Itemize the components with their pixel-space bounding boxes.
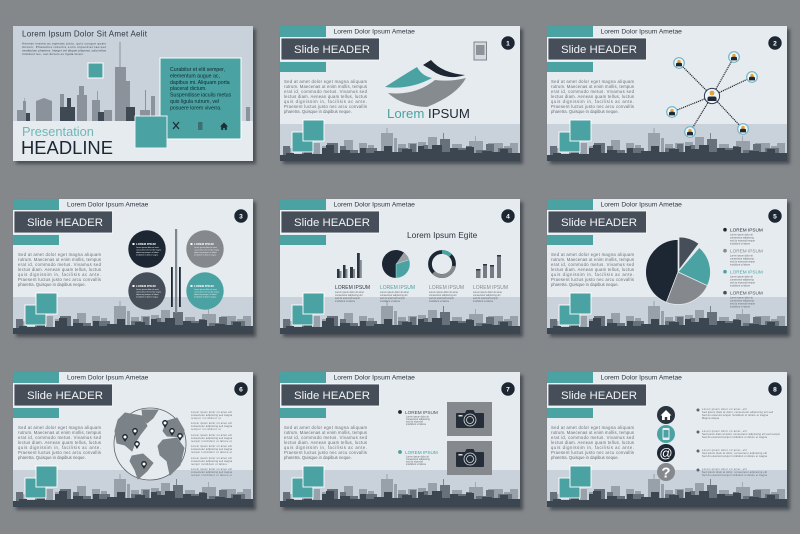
right text column: consectetur adipiscing sed magna [191, 414, 233, 417]
teal text panel: Suspendisse iaculis metus [170, 93, 232, 99]
right text column: consectetur adipiscing sed magna [191, 425, 233, 428]
body text: rutrum. Maecenas ut enim mollis, tempus [551, 430, 634, 435]
body text: erat id, commodo metus. Vivamus sed [284, 435, 368, 440]
list item 3: Lorem ipsum dolor sit amet, elit [702, 449, 747, 452]
number badge [501, 382, 515, 396]
circle: dark: consectetur elit sed do magna [136, 248, 162, 252]
list item 2 [696, 430, 780, 439]
slide 7: photos [280, 372, 523, 510]
circle: slate: Lorem ipsum dolor sit amet [136, 288, 159, 291]
icon: at sign: @ [659, 446, 673, 460]
body text: quis dignissim in, facilisis ac ante. [284, 445, 367, 450]
legend item 4: consectetur adipiscing [730, 300, 754, 302]
body text [551, 425, 635, 460]
top title: Lorem Dolor Ipsum Ametae [600, 202, 682, 208]
top title: Lorem Dolor Ipsum Ametae [334, 28, 415, 36]
logo mark [385, 60, 466, 107]
teal squares [25, 293, 57, 325]
body text: rutrum. Maecenas ut enim mollis, tempus [551, 84, 634, 89]
icon: phone [198, 122, 202, 130]
number badge: 1 [506, 40, 510, 47]
list item 2: Sed do eiusmod tempor incididunt ut dolore et magna [702, 436, 768, 439]
label block 3: sed do eiusmod tempor [429, 297, 454, 300]
body text: Sed at amet dolor eget magna aliquam [284, 79, 368, 84]
body text: erat id, commodo metus. Vivamus sed [18, 262, 102, 267]
body text: quis dignissim in, facilisis ac ante. [551, 272, 634, 277]
icon: tablet [474, 42, 486, 60]
label block 1: LOREM IPSUM [335, 285, 370, 291]
header bar [14, 384, 112, 406]
slide 5: pie [547, 199, 790, 337]
teal squares [292, 293, 324, 325]
body text: lectus diam. Aenean quam tellus, luctus [284, 440, 367, 445]
number badge [501, 209, 515, 223]
circle: grey: adipiscing tempor ut labore [194, 251, 217, 254]
legend item 1: sed do eiusmod tempor [730, 240, 755, 242]
circle: dark: incididunt et dolore magna [136, 254, 159, 256]
globe with pins [114, 408, 186, 480]
list item 1 [696, 408, 774, 420]
body text: pharetra. Quisque in dapibus neque. [284, 109, 352, 114]
label block 4 [473, 285, 508, 303]
top title: Lorem Dolor Ipsum Ametae [67, 202, 149, 208]
teal text panel: placerat dictum. [170, 86, 207, 92]
header text: Slide HEADER [561, 390, 637, 402]
body text: lectus diam. Aenean quam tellus, luctus [551, 267, 634, 272]
label block 4: Lorem ipsum dolor sit amet [473, 291, 502, 294]
text item 1 [398, 410, 438, 426]
circle: grey: Lorem ipsum dolor sit amet [194, 246, 217, 249]
teal text panel [160, 58, 241, 139]
teal text panel: quis ligula rutrum, vel [170, 99, 219, 105]
teal squares [559, 293, 591, 325]
label block 1 [335, 285, 370, 303]
text item 1: incididunt ut labore [406, 423, 427, 426]
number badge [234, 209, 248, 223]
icon: question mark [657, 463, 675, 482]
legend item 1: incididunt ut labore [730, 242, 751, 246]
cover intro text: vestibulum pharetra. Integer vel aliquet placerat, odio tellus [22, 48, 106, 52]
circle: teal: Lorem ipsum dolor sit amet [194, 288, 217, 291]
body text: Sed at amet dolor eget magna aliquam [551, 79, 634, 84]
body text: quis dignissim in, facilisis ac ante. [284, 99, 367, 104]
right text column: Lorem ipsum dolor sit amet elit [191, 434, 232, 437]
teal squares [292, 466, 324, 498]
text item 2: sed do eiusmod [406, 460, 424, 464]
legend item 3: incididunt ut labore [730, 284, 751, 288]
right text column: consectetur adipiscing sed magna [191, 437, 233, 440]
header bar [14, 211, 112, 233]
body text [284, 425, 368, 460]
body text: erat id, commodo metus. Vivamus sed [18, 435, 102, 440]
label block 2: sed do eiusmod tempor [380, 297, 405, 300]
number badge [768, 36, 782, 50]
icon: home [220, 122, 228, 130]
header text: Slide HEADER [561, 44, 637, 56]
top title: Lorem Dolor Ipsum Ametae [334, 202, 415, 208]
label block 2: incididunt ut labore [380, 300, 401, 303]
circle: dark [128, 230, 166, 268]
label block 2: Lorem ipsum dolor sit amet [380, 291, 409, 294]
label block 3: LOREM IPSUM [429, 285, 464, 291]
number badge [501, 36, 515, 50]
right text column: Lorem ipsum dolor sit amet elit [191, 457, 232, 460]
list item 1: Sed ipsum diam at dolor, consectetur adipiscing elit sed [702, 411, 774, 414]
label block 4: sed do eiusmod tempor [473, 297, 498, 300]
teal text panel: posuere lorem viverra. [170, 105, 222, 111]
right text column: tempor incididunt ut [191, 428, 221, 431]
teal text panel: Curabitur et elit semper, [170, 67, 225, 73]
body text: pharetra. Quisque in dapibus neque. [551, 455, 619, 460]
body text: Praesent luctus justo nec arcu convallis [284, 450, 367, 455]
teal text panel: dapibus mi. Aliquam porta [170, 80, 230, 86]
body text: lectus diam. Aenean quam tellus, luctus [284, 94, 367, 99]
circle: teal: consectetur elit sed do magna [194, 290, 220, 294]
label block 1: sed do eiusmod tempor [335, 297, 360, 300]
label block 4: LOREM IPSUM [473, 285, 508, 291]
legend item 3 [723, 270, 763, 288]
icon: question mark: ? [661, 464, 671, 482]
number badge: 2 [773, 40, 777, 47]
cover title: Lorem Ipsum Dolor Sit Amet Aelit [22, 30, 148, 38]
cover intro text: dictum. Phasellus lobortis enim imperdiet laoreet [22, 45, 106, 49]
circle: grey: incididunt et dolore magna [194, 254, 217, 256]
legend item 3: sed do eiusmod tempor [730, 282, 755, 284]
legend item 4: Lorem ipsum dolor sit [730, 296, 753, 300]
right text column: tempor incididunt ut labore et [191, 474, 232, 477]
legend item 4 [723, 290, 763, 308]
text item 2: incididunt ut labore [406, 463, 427, 466]
legend item 1: consectetur adipiscing [730, 236, 754, 240]
cover intro text: Aenean massa ac egestas justo, quis congue quam [22, 42, 107, 46]
body text [551, 252, 635, 287]
label block 1: consectetur adipiscing elit [335, 294, 363, 297]
body text: lectus diam. Aenean quam tellus, luctus [551, 440, 634, 445]
top title: Lorem Dolor Ipsum Ametae [67, 374, 149, 382]
list item 4: Lorem ipsum dolor sit amet, elit [702, 468, 747, 471]
right text column: Lorem ipsum dolor sit amet elit [191, 411, 232, 414]
right text column: tempor incididunt ut labore et [191, 440, 232, 443]
header text: Slide HEADER [27, 390, 103, 402]
right text column: tempor incididunt ut labore et [191, 451, 232, 454]
header bar [281, 38, 380, 60]
bar chart: left [337, 253, 362, 278]
number badge: 4 [506, 213, 510, 220]
text item 1: consectetur adipiscing [406, 418, 430, 421]
right text column [191, 411, 233, 477]
slide 8: icon list [547, 372, 790, 510]
right text column: consectetur adipiscing sed magna [191, 448, 233, 451]
teal text panel: elementum augue ac, [170, 73, 220, 79]
legend item 2: incididunt ut labore [730, 264, 751, 266]
body text: quis dignissim in, facilisis ac ante. [18, 445, 101, 450]
slide: cover [13, 26, 256, 164]
list item 2: Sed ipsum diam at dolor, consectetur adipiscing elit sed tempor [702, 433, 780, 436]
body text: erat id, commodo metus. Vivamus sed [551, 435, 635, 440]
circle: dark: adipiscing tempor ut labore [136, 251, 159, 254]
label block 4: incididunt ut labore [473, 300, 494, 303]
body text [551, 79, 635, 114]
body text: rutrum. Maecenas ut enim mollis, tempus [284, 84, 367, 89]
text item 2: consectetur adipiscing [406, 458, 430, 461]
body text: erat id, commodo metus. Vivamus sed [551, 89, 635, 94]
body text: Praesent luctus justo nec arcu convallis [551, 104, 634, 109]
circle: teal: incididunt et dolore magna [194, 296, 217, 298]
number badge [234, 382, 248, 396]
list item 1: Magna aliqua [702, 417, 720, 420]
header bar [548, 38, 646, 60]
number badge: 7 [506, 386, 510, 393]
legend item 3: consectetur adipiscing [730, 278, 754, 282]
label block 2 [380, 285, 415, 303]
legend item 2: sed do eiusmod tempor [730, 260, 755, 264]
donut chart [430, 252, 454, 276]
cover intro text: tincidunt leo, non dictum ex ligula lorem. [22, 52, 84, 56]
body text: rutrum. Maecenas ut enim mollis, tempus [551, 257, 634, 262]
small teal square [88, 63, 103, 78]
legend item 4: incididunt ut labore [730, 306, 751, 308]
number badge: 5 [773, 213, 777, 220]
legend item 2: LOREM IPSUM [730, 248, 763, 254]
body text: Sed at amet dolor eget magna aliquam [551, 252, 634, 257]
legend item 4: sed do eiusmod tempor [730, 302, 755, 306]
body text: pharetra. Quisque in dapibus neque. [551, 109, 619, 114]
body text: lectus diam. Aenean quam tellus, luctus [18, 267, 101, 272]
list item 3: Sed do eiusmod tempor incididunt ut dolore et magna [702, 455, 768, 458]
header text: Slide HEADER [294, 390, 370, 402]
body text: Praesent luctus justo nec arcu convallis [284, 104, 367, 109]
circle: teal: LOREM IPSUM [194, 284, 214, 288]
circle: slate: incididunt et dolore magna [136, 296, 159, 298]
label block 4: consectetur adipiscing elit [473, 294, 501, 297]
body text [18, 252, 102, 287]
label block 1: incididunt ut labore [335, 300, 356, 303]
center bars [171, 229, 181, 313]
legend item 1 [723, 228, 763, 246]
logo text: Lorem IPSUM [387, 106, 470, 121]
header text: Slide HEADER [561, 217, 637, 229]
circle: slate: LOREM IPSUM [136, 284, 156, 288]
list item 1: Lorem ipsum dolor sit amet, elit [702, 408, 747, 411]
list item 1: Sed do eiusmod tempor incididunt ut dolore et magna [702, 414, 769, 417]
right text column: consectetur adipiscing sed magna [191, 460, 233, 463]
slide 1: logo [280, 26, 523, 164]
circle: dark: LOREM IPSUM [136, 242, 156, 246]
number badge [768, 209, 782, 223]
right text column: Lorem ipsum dolor sit amet elit [191, 445, 232, 448]
body text [18, 425, 102, 460]
body text: lectus diam. Aenean quam tellus, luctus [551, 94, 634, 99]
slide 6: globe [13, 372, 256, 510]
large teal square [135, 116, 167, 148]
legend item 2: consectetur adipiscing [730, 258, 754, 260]
list item 3: Sed ipsum diam at dolor, consectetur adipiscing elit [702, 452, 767, 455]
circle: slate: adipiscing tempor ut labore [136, 293, 159, 296]
body text: pharetra. Quisque in dapibus neque. [18, 455, 86, 460]
circle: slate: consectetur elit sed do magna [136, 290, 162, 294]
label block 2: LOREM IPSUM [380, 285, 415, 291]
bar chart: right [476, 255, 501, 278]
circle: teal [186, 272, 224, 310]
body text: Praesent luctus justo nec arcu convallis [551, 450, 634, 455]
number badge [768, 382, 782, 396]
body text [284, 79, 368, 114]
body text: Praesent luctus justo nec arcu convallis [18, 277, 101, 282]
pie chart [646, 237, 710, 304]
body text: quis dignissim in, facilisis ac ante. [18, 272, 101, 277]
circle: dark: Lorem ipsum dolor sit amet [136, 246, 159, 249]
circle: grey: LOREM IPSUM [194, 242, 214, 246]
header text: Slide HEADER [294, 44, 370, 56]
body text: Sed at amet dolor eget magna aliquam [551, 425, 634, 430]
slide 2: network [547, 26, 790, 164]
body text: erat id, commodo metus. Vivamus sed [284, 89, 368, 94]
circle: teal: adipiscing tempor ut labore [194, 293, 217, 296]
network diagram [667, 52, 757, 137]
icon: home [657, 406, 675, 424]
right text column: tempor incididunt ut labore [191, 463, 228, 466]
list item 4: Sed ipsum diam at dolor, consectetur adipiscing elit [702, 471, 767, 474]
text item 2: LOREM IPSUM [405, 450, 438, 455]
circle: slate [128, 272, 166, 310]
legend item 1: LOREM IPSUM [730, 228, 763, 232]
header text: Slide HEADER [294, 217, 370, 229]
teal squares [559, 466, 591, 498]
right text column: Lorem ipsum dolor sit amet elit [191, 468, 232, 471]
legend item 3: Lorem ipsum dolor sit [730, 276, 753, 278]
number badge: 3 [239, 213, 243, 220]
body text: rutrum. Maecenas ut enim mollis, tempus [18, 257, 101, 262]
header bar [281, 211, 380, 233]
header bar [281, 384, 380, 406]
pie chart [382, 250, 410, 278]
top title: Lorem Dolor Ipsum Ametae [334, 374, 415, 382]
legend item 3: LOREM IPSUM [730, 270, 763, 274]
top title: Lorem Dolor Ipsum Ametae [600, 374, 682, 382]
label block 3: consectetur adipiscing elit [429, 294, 457, 297]
body text: rutrum. Maecenas ut enim mollis, tempus [284, 430, 367, 435]
label block 1: Lorem ipsum dolor sit amet [335, 291, 364, 294]
body text: Sed at amet dolor eget magna aliquam [18, 425, 102, 430]
body text: lectus diam. Aenean quam tellus, luctus [18, 440, 101, 445]
teal squares [292, 120, 324, 152]
header bar [548, 211, 646, 233]
body text: Praesent luctus justo nec arcu convallis [551, 277, 634, 282]
body text: quis dignissim in, facilisis ac ante. [551, 99, 634, 104]
photo placeholder 1 [447, 402, 492, 436]
top title: Lorem Dolor Ipsum Ametae [600, 28, 682, 36]
text item 2 [398, 450, 438, 466]
number badge: 8 [773, 386, 777, 393]
chart heading: Lorem Ipsum Egite [407, 230, 478, 240]
right text column: tempor incididunt ut [191, 417, 221, 420]
right text column: consectetur adipiscing sed magna [191, 471, 233, 474]
presentation heading: Presentation [22, 124, 94, 139]
body text: pharetra. Quisque in dapibus neque. [284, 455, 352, 460]
cover intro text [22, 42, 107, 56]
text item 1: Lorem ipsum dolor sit [406, 416, 429, 418]
text item 2: Lorem ipsum dolor sit [406, 456, 429, 458]
label block 2: consectetur adipiscing elit [380, 294, 408, 297]
headline: HEADLINE [21, 137, 113, 158]
list item 3 [696, 449, 768, 458]
teal squares [25, 466, 57, 498]
legend item 2 [723, 248, 763, 266]
icon: tools [173, 122, 179, 129]
body text: pharetra. Quisque in dapibus neque. [18, 282, 86, 287]
circle: grey: consectetur elit sed do magna [194, 248, 220, 252]
label block 3: Lorem ipsum dolor sit amet [429, 291, 458, 294]
right text column: Lorem ipsum dolor sit amet elit [191, 422, 232, 425]
body text: rutrum. Maecenas ut enim mollis, tempus [18, 430, 101, 435]
icon: phone [657, 425, 675, 443]
list item 4 [696, 468, 768, 477]
body text: Sed at amet dolor eget magna aliquam [18, 252, 102, 257]
icon: at sign [657, 444, 675, 462]
header text: Slide HEADER [27, 217, 103, 229]
label block 3 [429, 285, 464, 303]
teal squares [559, 120, 591, 152]
list item 4: Sed do eiusmod tempor incididunt ut dolore et magna [702, 474, 768, 477]
body text: Sed at amet dolor eget magna aliquam [284, 425, 368, 430]
legend item 4: LOREM IPSUM [730, 290, 763, 296]
number badge: 6 [239, 386, 243, 393]
slide 3: four circles [13, 199, 256, 337]
header bar [548, 384, 646, 406]
body text: erat id, commodo metus. Vivamus sed [551, 262, 635, 267]
text item 1: sed do eiusmod [406, 420, 424, 424]
label block 3: incididunt ut labore [429, 300, 450, 303]
body text: quis dignissim in, facilisis ac ante. [551, 445, 634, 450]
body text: Praesent luctus justo nec arcu convallis [18, 450, 101, 455]
list item 2: Lorem ipsum dolor sit amet, elit [702, 430, 747, 433]
legend item 1: Lorem ipsum dolor sit [730, 234, 753, 236]
cover skyline [17, 42, 250, 121]
legend item 2: Lorem ipsum dolor sit [730, 254, 753, 258]
slide 4: charts [280, 199, 523, 337]
text item 1: LOREM IPSUM [405, 410, 438, 415]
photo placeholder 2 [447, 441, 492, 475]
circle: grey [186, 230, 224, 268]
body text: pharetra. Quisque in dapibus neque. [551, 282, 619, 287]
